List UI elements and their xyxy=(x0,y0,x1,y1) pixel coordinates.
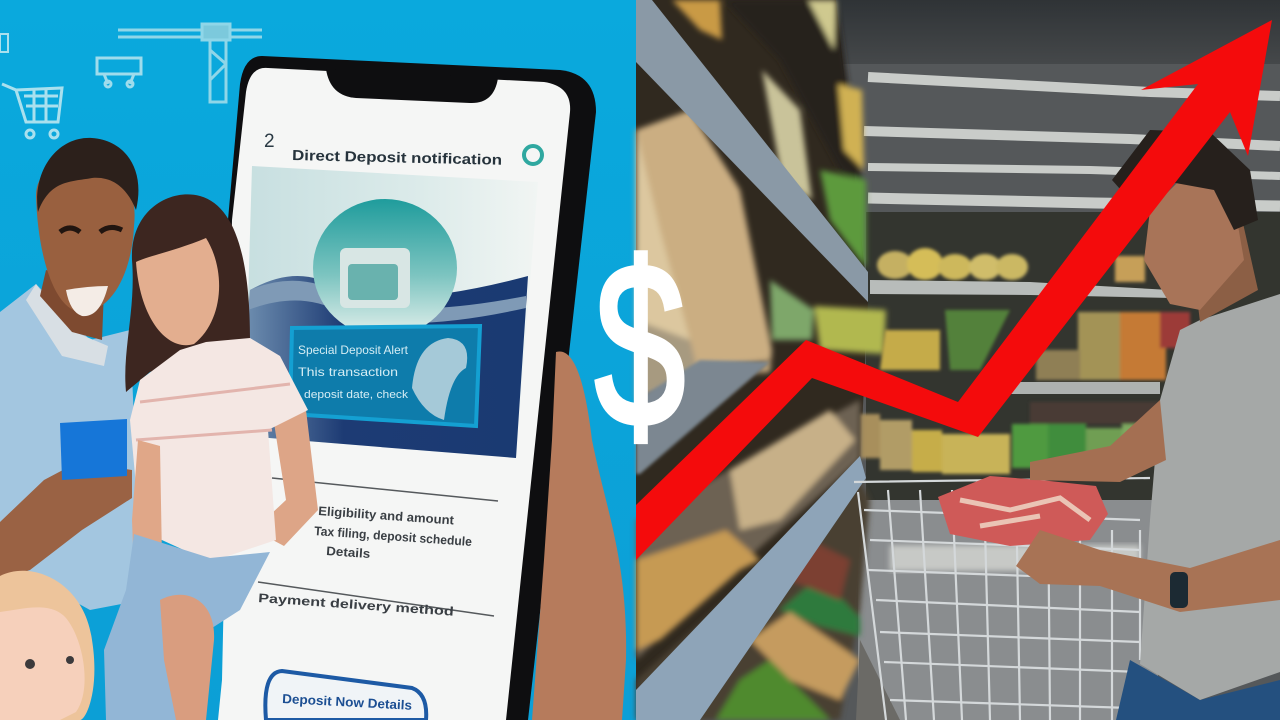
ceiling xyxy=(830,0,1280,64)
middle shelf goods xyxy=(860,248,1190,474)
phone body text xyxy=(258,478,498,619)
blue phone xyxy=(60,419,127,480)
cart contents xyxy=(890,545,1140,571)
deposit card: Special Deposit Alert xyxy=(298,343,409,357)
father collar xyxy=(26,284,108,366)
girl shirt stripes xyxy=(136,384,290,440)
shopper arm upper xyxy=(1030,400,1166,482)
phone button: Deposit Now Details xyxy=(282,691,412,713)
deposit card: This transaction xyxy=(298,365,398,379)
phone xyxy=(218,56,596,720)
shelf edges xyxy=(870,280,1172,298)
orb icon xyxy=(340,248,410,308)
aisle grey shelf xyxy=(636,360,770,474)
store floor xyxy=(856,640,900,720)
shopping cart xyxy=(854,478,1150,720)
girl shirt xyxy=(130,338,308,562)
phone body text: Tax filing, deposit schedule xyxy=(314,524,472,549)
father face xyxy=(36,163,135,312)
shopper hair xyxy=(1112,130,1258,230)
back wall xyxy=(866,212,1280,502)
bread bags xyxy=(636,110,772,378)
phone body xyxy=(225,56,596,720)
shopper shirt xyxy=(1140,294,1280,700)
panel: blue background left xyxy=(0,0,636,720)
lower shelf rail xyxy=(636,456,866,720)
illustration: girl xyxy=(104,194,318,720)
girl arm right xyxy=(254,410,318,546)
phone body text: Payment delivery method xyxy=(258,591,454,619)
father smile xyxy=(66,286,108,316)
illustration: father xyxy=(0,138,142,610)
dollar sign: $ xyxy=(595,216,685,475)
girl hair xyxy=(125,194,250,392)
orb xyxy=(313,199,457,337)
shopper arm lower xyxy=(1016,530,1280,612)
girl face xyxy=(136,238,219,345)
girl knee xyxy=(160,595,214,720)
store background xyxy=(636,0,1280,720)
phone screen xyxy=(218,68,570,720)
upper goods xyxy=(636,0,886,400)
lower shelf goods xyxy=(636,400,870,720)
meat package xyxy=(938,476,1108,546)
ceiling lights xyxy=(864,77,1280,206)
phone notch xyxy=(326,69,498,103)
illustration: hand holding phone xyxy=(532,351,626,720)
father neck xyxy=(40,270,104,340)
father shirt xyxy=(0,284,142,610)
icon: teal logo xyxy=(524,146,542,164)
shopper neck xyxy=(1190,210,1258,322)
blue info panel xyxy=(290,326,480,426)
phone button xyxy=(265,671,426,720)
deposit card xyxy=(244,166,538,458)
left aisle shelf background xyxy=(636,0,868,720)
illustration: toddler xyxy=(0,571,94,720)
father arm xyxy=(0,462,132,580)
shopper face xyxy=(1144,180,1244,310)
father eyes xyxy=(60,227,122,232)
father hair xyxy=(37,138,138,212)
phone body text: Details xyxy=(326,544,371,561)
girl arm left xyxy=(132,440,162,572)
icon: small building doodle xyxy=(97,58,141,87)
cart backdrop xyxy=(858,500,1158,720)
icon: shopping cart doodle xyxy=(2,84,62,138)
shopper jeans xyxy=(1116,660,1280,720)
red rising arrow xyxy=(636,20,1272,560)
phone: Direct Deposit notification xyxy=(292,148,502,169)
shopper xyxy=(1016,130,1280,720)
deposit card: deposit date, check xyxy=(304,389,409,401)
icon: crane doodle xyxy=(118,24,262,102)
icon: edge doodle xyxy=(0,34,8,52)
phone body text: Eligibility and amount xyxy=(318,504,455,528)
phone heading: 2 xyxy=(264,131,275,152)
girl jeans xyxy=(104,534,270,720)
top shelf edge xyxy=(636,0,868,302)
bubble xyxy=(412,338,467,420)
panel: grocery store right xyxy=(636,0,1280,720)
wristwatch xyxy=(1170,572,1188,608)
